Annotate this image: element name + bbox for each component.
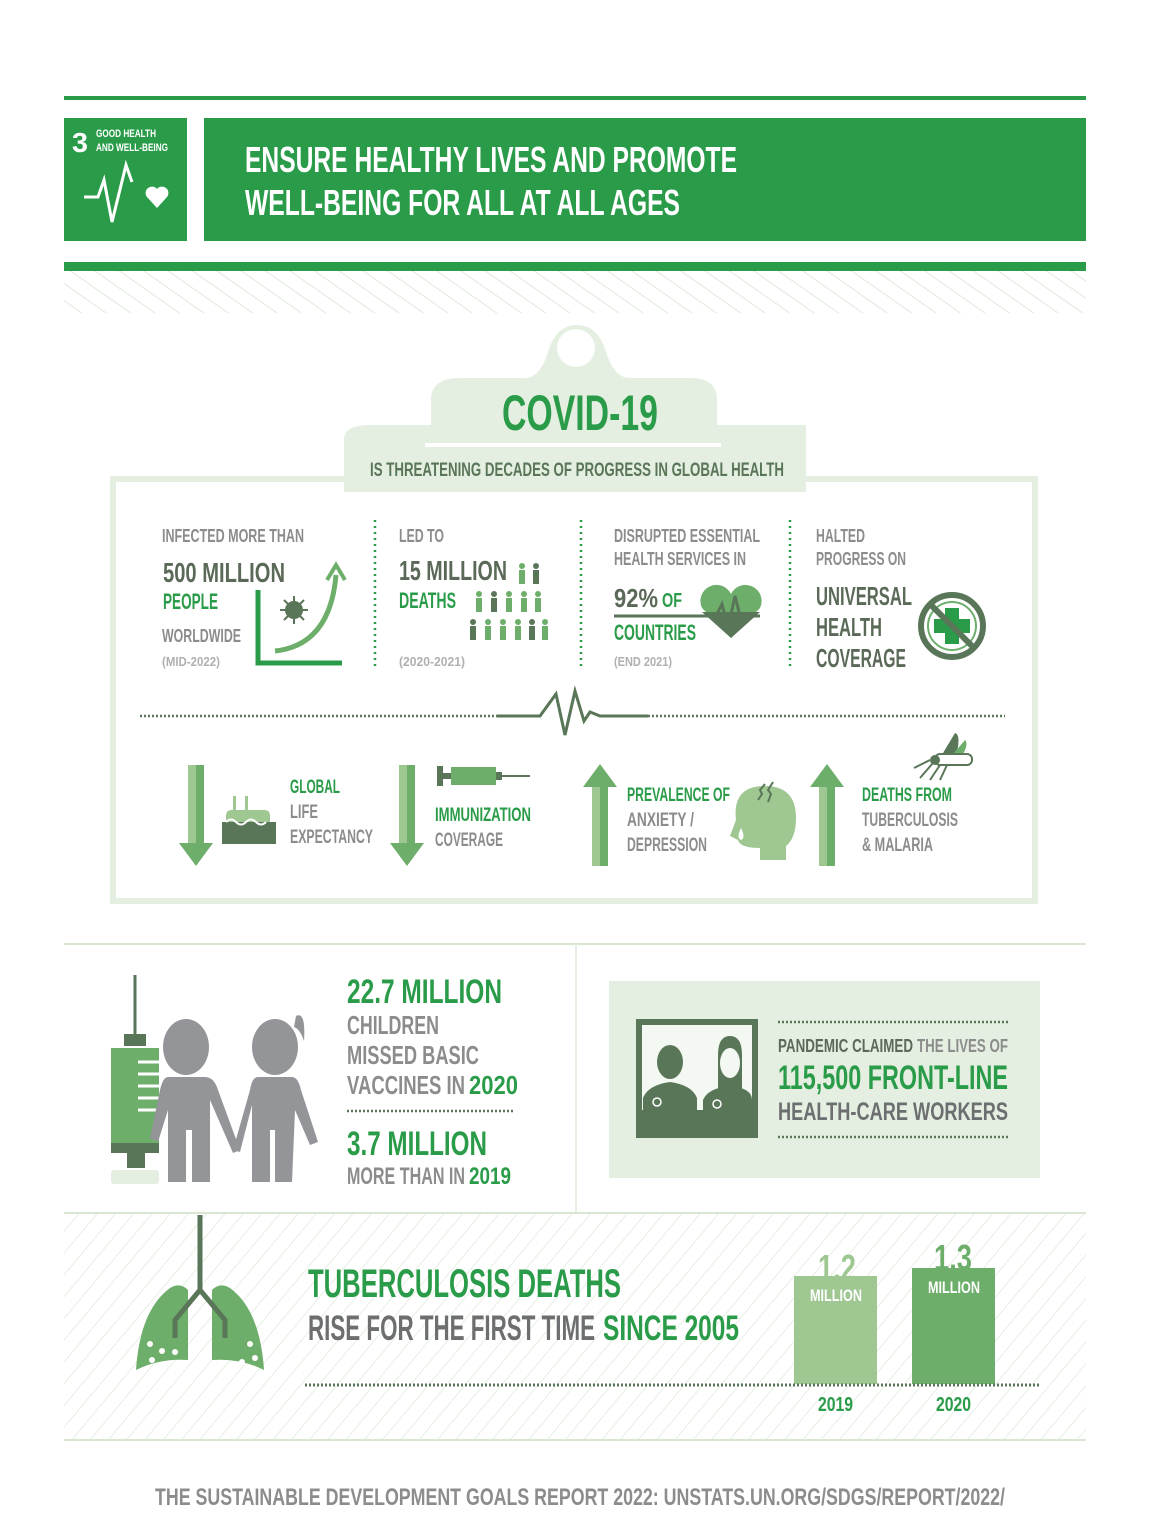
trend: anxiety/depression up: ANXIETY / bbox=[627, 810, 695, 831]
trend: life expectancy down: LIFE bbox=[290, 802, 318, 823]
stat: children missed vaccines: 2020 bbox=[469, 1070, 518, 1100]
stat: children missed vaccines: CHILDREN bbox=[347, 1010, 439, 1040]
title bar: ENSURE HEALTHY LIVES AND PROMOTE bbox=[245, 139, 737, 180]
title bar bbox=[204, 118, 1086, 241]
stat: deaths: 15 MILLION bbox=[399, 555, 507, 586]
stat: disrupted services bbox=[614, 526, 762, 669]
stat: universal health coverage: HEALTH bbox=[816, 612, 882, 642]
bar chart: TB deaths bbox=[305, 1237, 1040, 1416]
stat: infected: WORLDWIDE bbox=[162, 626, 241, 646]
trend: anxiety/depression up: PREVALENCE OF bbox=[627, 785, 730, 806]
bar chart: TB deaths: 1.2 bbox=[818, 1247, 856, 1288]
stat: children missed vaccines: 22.7 MILLION bbox=[347, 973, 502, 1011]
trend: anxiety/depression up: DEPRESSION bbox=[627, 835, 707, 856]
trend: tuberculosis & malaria up: & MALARIA bbox=[862, 835, 933, 856]
trend: life expectancy down bbox=[179, 765, 373, 866]
panel: tuberculosis deaths: TUBERCULOSIS DEATHS bbox=[308, 1262, 621, 1306]
logo: SDG 3: 3 bbox=[72, 127, 88, 158]
stat: universal health coverage: UNIVERSAL bbox=[816, 581, 912, 611]
panel: health-care workers: PANDEMIC CLAIMED bbox=[778, 1036, 913, 1056]
panel: health-care workers: HEALTH-CARE WORKERS bbox=[778, 1098, 1008, 1126]
stat: infected: 500 MILLION bbox=[163, 557, 285, 588]
icon: heart bbox=[700, 585, 762, 638]
stat: infected: PEOPLE bbox=[163, 589, 218, 614]
stat: children missed vaccines: VACCINES IN bbox=[347, 1070, 465, 1100]
stat: infected bbox=[162, 526, 345, 669]
panel: covid impacts bbox=[113, 479, 1035, 901]
bar chart: TB deaths: 1.3 bbox=[934, 1237, 972, 1278]
illustration: syringe and children bbox=[111, 975, 318, 1184]
stat: infected: INFECTED MORE THAN bbox=[162, 526, 304, 546]
stat: children missed vaccines: 3.7 MILLION bbox=[347, 1125, 487, 1163]
stat: universal health coverage: COVERAGE bbox=[816, 643, 906, 673]
icon: lungs bbox=[136, 1215, 264, 1370]
stat: disrupted services: 92% bbox=[614, 583, 658, 613]
stat: disrupted services: HEALTH SERVICES IN bbox=[614, 549, 746, 569]
stat: deaths: (2020-2021) bbox=[399, 654, 465, 669]
panel: tuberculosis deaths: RISE FOR THE FIRST TIME bbox=[308, 1309, 595, 1348]
panel: health-care workers: 115,500 FRONT-LINE bbox=[778, 1059, 1008, 1097]
clipboard header: COVID-19: COVID-19 bbox=[502, 385, 658, 441]
trend: tuberculosis & malaria up bbox=[810, 733, 972, 866]
trend: life expectancy down: GLOBAL bbox=[290, 777, 340, 798]
stat: children missed vaccines: 2019 bbox=[469, 1163, 511, 1190]
stat: disrupted services: DISRUPTED ESSENTIAL bbox=[614, 526, 760, 546]
stat: deaths: DEATHS bbox=[399, 588, 456, 613]
clipboard header: COVID-19: IS THREATENING DECADES OF PROGRESS IN GLOBAL HEALTH bbox=[370, 460, 784, 481]
panel: tuberculosis deaths: SINCE 2005 bbox=[603, 1309, 739, 1348]
stat: universal health coverage bbox=[816, 526, 983, 673]
trend: immunization down: COVERAGE bbox=[435, 830, 503, 851]
clipboard header: COVID-19 bbox=[344, 325, 806, 492]
stat: disrupted services: COUNTRIES bbox=[614, 620, 696, 645]
bar chart: TB deaths: MILLION bbox=[810, 1286, 862, 1305]
panel: health-care workers bbox=[609, 981, 1040, 1178]
stat: children missed vaccines: MISSED BASIC bbox=[347, 1040, 479, 1070]
bar chart: TB deaths: 2019 bbox=[818, 1394, 853, 1416]
ecg divider bbox=[140, 691, 1005, 735]
panel: health-care workers: THE LIVES OF bbox=[917, 1036, 1008, 1056]
panel: tuberculosis deaths bbox=[64, 1213, 1086, 1440]
stat: universal health coverage: PROGRESS ON bbox=[816, 549, 906, 569]
trend: immunization down: IMMUNIZATION bbox=[435, 805, 531, 826]
trend: tuberculosis & malaria up: DEATHS FROM bbox=[862, 785, 952, 806]
logo: SDG 3 bbox=[64, 118, 187, 241]
stat: children missed vaccines: MORE THAN IN bbox=[347, 1163, 465, 1190]
stat: universal health coverage: HALTED bbox=[816, 526, 865, 546]
trend: anxiety/depression up bbox=[583, 764, 796, 866]
stat: children missed vaccines bbox=[347, 973, 518, 1190]
title bar: WELL-BEING FOR ALL AT ALL AGES bbox=[245, 182, 680, 223]
stat: deaths bbox=[399, 526, 548, 669]
trend: immunization down bbox=[390, 765, 531, 866]
logo: SDG 3: AND WELL-BEING bbox=[96, 142, 168, 154]
bar chart: TB deaths: 2020 bbox=[936, 1394, 971, 1416]
stat: deaths: LED TO bbox=[399, 526, 444, 546]
bar chart: TB deaths: MILLION bbox=[928, 1278, 980, 1297]
stat: disrupted services: (END 2021) bbox=[614, 654, 672, 669]
logo: SDG 3: GOOD HEALTH bbox=[96, 128, 156, 140]
trend: life expectancy down: EXPECTANCY bbox=[290, 827, 373, 848]
trend: tuberculosis & malaria up: TUBERCULOSIS bbox=[862, 810, 958, 831]
stat: disrupted services: OF bbox=[662, 590, 682, 612]
stat: infected: (MID-2022) bbox=[162, 654, 220, 669]
